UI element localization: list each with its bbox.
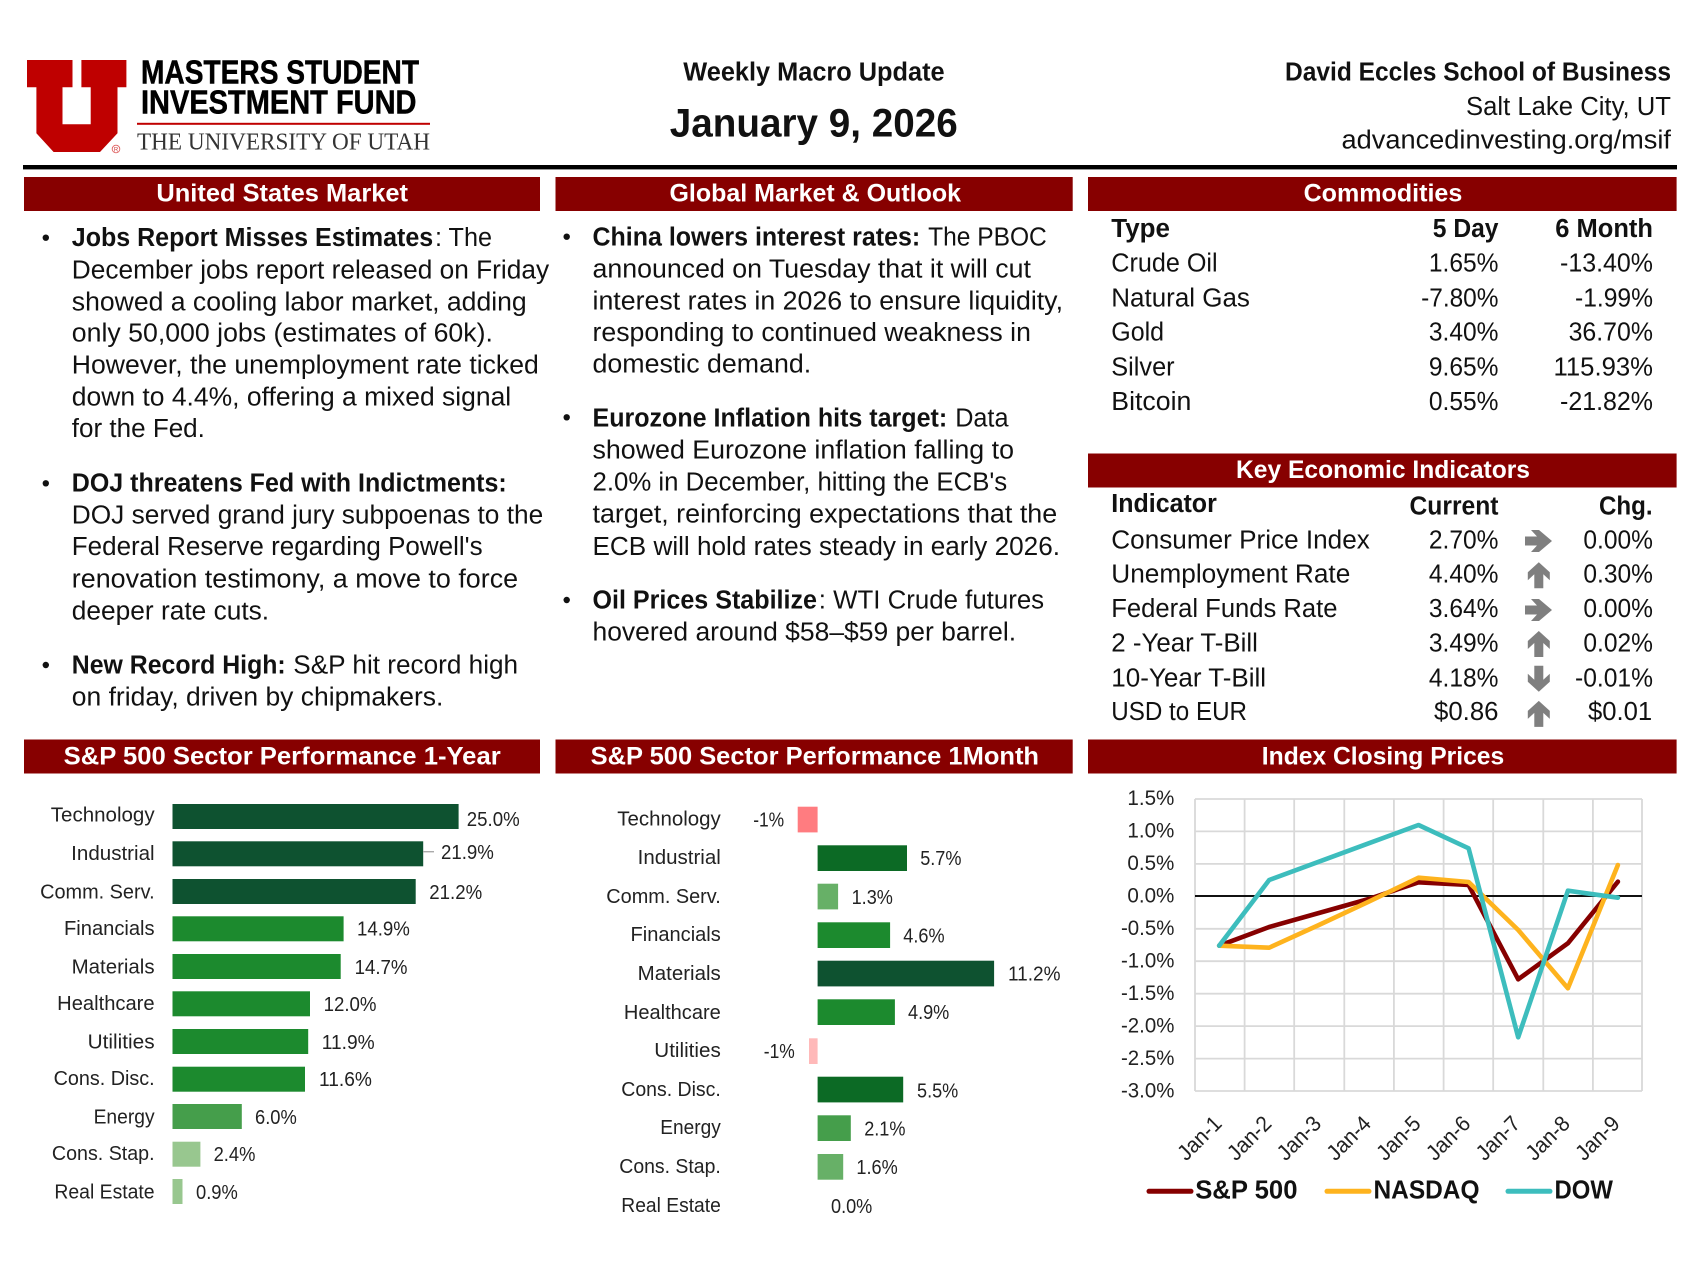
heading: Index Closing Prices: Index Closing Prices (1262, 742, 1504, 770)
values: -1% (753, 810, 784, 832)
sector labels: Materials (638, 963, 721, 985)
row: Unemployment: Unemployment Rate (1111, 561, 1350, 589)
text block: record high: on friday, driven by chipmakers. (72, 684, 443, 712)
date title: January 9, 2026 (670, 102, 958, 146)
panel: Index Closing Prices (1088, 740, 1677, 1204)
row: Crude Oil (1111, 250, 1653, 278)
row: 10-Year: -0.01% (1575, 664, 1653, 692)
table header: Type (1111, 215, 1170, 243)
text block: oil: hovered around $58–$59 per barrel. (592, 618, 1016, 646)
x axis labels: Jan-6 (1421, 1111, 1475, 1165)
values: 0.9% (196, 1182, 238, 1204)
text block: Eurozone: target, reinforcing expectations that the (592, 501, 1057, 529)
series: DOW (1219, 825, 1618, 1037)
sector labels: Healthcare (624, 1002, 721, 1024)
row: Gold: Gold (1111, 319, 1164, 347)
text block: DOJ (43, 470, 543, 625)
x axis labels: Jan-1 (1172, 1111, 1227, 1165)
heading: 1Month: S&P 500 Sector Performance 1Month (591, 742, 1039, 770)
row: Fed Funds: 3.64% (1429, 595, 1498, 623)
subtitle: Weekly Macro Update (683, 59, 945, 87)
row: Bitcoin (1111, 388, 1653, 416)
row: Bitcoin: Bitcoin (1111, 388, 1191, 416)
row: Natural Gas: Natural Gas (1111, 284, 1250, 312)
values: 1.3% (852, 887, 893, 909)
values: 4.6% (903, 925, 945, 947)
x axis labels: Jan-4 (1321, 1111, 1376, 1165)
text block: China: China lowers interest rates: (592, 224, 920, 252)
sector labels: Cons. Stap. (52, 1143, 155, 1165)
text block: jobs report: down to 4.4%, offering a mixed signal (72, 384, 511, 412)
legend: NASDAQ (1374, 1176, 1480, 1204)
row: Unemployment: 0.30% (1583, 561, 1653, 589)
text block: DOJ: DOJ served grand jury subpoenas to the (72, 501, 543, 529)
row: Unemployment (1111, 561, 1653, 589)
text block: China: announced on Tuesday that it will cut (592, 256, 1031, 284)
legend (1149, 1176, 1614, 1204)
sector labels (40, 805, 155, 1203)
text block: jobs report (43, 224, 549, 443)
values: 14.7% (355, 957, 408, 979)
sector labels: Healthcare (57, 993, 155, 1015)
text block: Eurozone: Data (955, 405, 1009, 433)
bars (798, 807, 994, 1180)
legend: S&P 500 (1195, 1176, 1298, 1204)
y axis labels: -3.0% (1121, 1080, 1174, 1103)
row: 10-Year: 10-Year T-Bill (1111, 664, 1266, 692)
panel: S&P 500 1-Year bar chart (24, 740, 540, 1204)
row: CPI: Consumer Price Index (1111, 526, 1370, 554)
text block: oil: : WTI Crude futures (819, 586, 1044, 614)
values (753, 810, 1061, 1218)
sector labels: Industrial (638, 847, 721, 869)
row: Fed Funds (1111, 595, 1653, 623)
registered mark (112, 145, 120, 153)
text block: DOJ: DOJ threatens Fed with Indictments: (72, 470, 507, 498)
sector labels: Technology (51, 805, 155, 827)
text block: China: responding to continued weakness in (592, 319, 1031, 347)
panel: Commodities (1088, 177, 1677, 416)
text block: DOJ: renovation testimony, a move to force (72, 565, 518, 593)
values: 0.0% (831, 1196, 872, 1218)
text block: record high (43, 651, 518, 712)
heading: Key Economic Indicators (1088, 454, 1677, 488)
x axis labels: Jan-2 (1222, 1111, 1276, 1165)
sector labels: Industrial (71, 843, 155, 865)
values: 2.4% (214, 1144, 256, 1166)
text block: Eurozone: ECB will hold rates steady in early 2026. (592, 533, 1060, 561)
values: 1.6% (856, 1157, 898, 1179)
row: CPI (1111, 526, 1653, 554)
heading: United States Market (24, 177, 540, 211)
row: Crude Oil: Crude Oil (1111, 250, 1218, 278)
logo text line 2: INVESTMENT FUND (141, 83, 416, 120)
text block: DOJ: deeper rate cuts. (72, 597, 269, 625)
text block: China (564, 224, 1063, 379)
sector labels: Real Estate (54, 1181, 155, 1203)
heading: Key Economic Indicators: Key Economic Indicators (1236, 456, 1530, 484)
y axis labels: -2.5% (1121, 1047, 1174, 1070)
row: Crude Oil: -13.40% (1560, 250, 1653, 278)
heading: Commodities: Commodities (1304, 180, 1462, 208)
sector labels: Cons. Disc. (54, 1068, 155, 1090)
sector labels: Materials (72, 956, 155, 978)
row: 2-Year: 2 -Year T-Bill (1111, 630, 1258, 658)
x axis labels: Jan-9 (1570, 1111, 1625, 1165)
title block (670, 59, 958, 146)
sector labels: Financials (630, 924, 721, 946)
row: Silver: 9.65% (1429, 353, 1498, 381)
x axis labels: Jan-7 (1471, 1111, 1525, 1165)
row: Silver (1111, 353, 1653, 381)
row: Natural Gas (1111, 284, 1653, 312)
row: Silver: Silver (1111, 353, 1175, 381)
text block: jobs report: : The (435, 224, 492, 252)
sector labels: Real Estate (621, 1195, 721, 1217)
logo text line 1: MASTERS STUDENT (141, 53, 419, 90)
y axis labels: -2.0% (1121, 1014, 1174, 1038)
y axis labels (1121, 787, 1174, 1103)
heading: 1-Year (24, 740, 540, 774)
row: USD to EUR: USD to EUR (1111, 698, 1247, 726)
table header (1111, 490, 1653, 520)
row: USD to EUR (1111, 698, 1652, 727)
heading: Global Market & Outlook (556, 177, 1073, 211)
row: 2-Year (1111, 630, 1653, 658)
row: 2-Year: 3.49% (1429, 630, 1498, 658)
text block: Eurozone: showed Eurozone inflation falling to (592, 436, 1014, 464)
y axis labels: 1.5% (1127, 787, 1174, 810)
y axis labels: 0.0% (1127, 884, 1174, 907)
x axis labels: Jan-8 (1520, 1111, 1575, 1165)
y axis labels: 0.5% (1127, 852, 1174, 875)
table header: Current (1410, 492, 1499, 520)
icon: block U (27, 60, 126, 152)
y axis labels: -1.5% (1121, 982, 1174, 1005)
x axis labels: Jan-5 (1371, 1111, 1426, 1165)
panel: Global Market & Outlook (556, 177, 1073, 646)
table header: Chg. (1599, 492, 1653, 520)
sector labels (606, 809, 721, 1217)
text block: jobs report: showed a cooling labor market, adding (72, 288, 527, 316)
values: 11.9% (322, 1032, 375, 1054)
row: Gold: 3.40% (1429, 319, 1498, 347)
row: Silver: 115.93% (1554, 353, 1653, 381)
y axis labels: -0.5% (1121, 917, 1174, 940)
row: CPI: 0.00% (1583, 526, 1653, 554)
text block: jobs report: for the Fed. (72, 415, 205, 443)
values: 21.2% (429, 882, 482, 904)
text block: oil: Oil Prices Stabilize (592, 586, 817, 614)
row: Natural Gas: -7.80% (1421, 284, 1498, 312)
values: 6.0% (255, 1107, 297, 1129)
sector labels: Cons. Stap. (619, 1156, 721, 1178)
values: -1% (764, 1041, 795, 1063)
text block: oil (564, 586, 1044, 646)
sector labels: Financials (64, 918, 155, 940)
text block: record high: New Record High: (72, 651, 286, 679)
sector labels: Utilities (88, 1031, 155, 1053)
school name: David Eccles School of Business (1285, 59, 1671, 87)
registered mark: R (114, 147, 119, 153)
sector labels: Energy (94, 1106, 155, 1128)
series: S&P 500 (1219, 882, 1618, 979)
y axis labels: -1.0% (1121, 950, 1174, 972)
text block: China: The PBOC (928, 224, 1047, 252)
x axis labels (1172, 1111, 1625, 1165)
heading: 1-Year: S&P 500 Sector Performance 1-Year (64, 742, 501, 770)
text block: jobs report: Jobs Report Misses Estimates (72, 224, 433, 252)
heading: Global Market & Outlook: Global Market & Outlook (670, 180, 961, 208)
values: 11.6% (319, 1069, 372, 1091)
bars (172, 804, 459, 1204)
text block: jobs report: However, the unemployment rate ticked (72, 351, 539, 379)
panel: United States Market (24, 177, 549, 712)
row: 10-Year: 4.18% (1429, 664, 1498, 692)
row: Fed Funds: 0.00% (1583, 595, 1653, 623)
row: Natural Gas: -1.99% (1575, 284, 1653, 312)
text block: record high: S&P hit record high (293, 651, 518, 679)
row: Crude Oil: 1.65% (1429, 250, 1498, 278)
x axis labels: Jan-3 (1272, 1111, 1326, 1165)
row: Bitcoin: -21.82% (1560, 388, 1653, 416)
legend: DOW (1554, 1176, 1614, 1204)
table header (1111, 215, 1653, 243)
text block: DOJ: Federal Reserve regarding Powell's (72, 533, 483, 561)
row: Gold: 36.70% (1569, 319, 1653, 347)
logo red line (137, 123, 430, 125)
text block: China: interest rates in 2026 to ensure liquidity, (592, 287, 1063, 315)
values: 11.2% (1008, 964, 1061, 986)
heading: United States Market: United States Market (156, 180, 409, 208)
table header: Indicator (1111, 490, 1217, 518)
panel: S&P 500 1-Month bar chart (556, 740, 1073, 1218)
table header: 6 Month (1555, 215, 1653, 243)
text block: jobs report: December jobs report released on Friday (72, 257, 549, 285)
text block: Eurozone: 2.0% in December, hitting the ECB's (592, 469, 1007, 497)
values: 4.9% (908, 1002, 949, 1024)
table header: 5 Day (1433, 215, 1499, 243)
sector labels: Cons. Disc. (621, 1079, 721, 1101)
text block: jobs report: only 50,000 jobs (estimates of 60k). (72, 320, 493, 348)
y axis labels: 1.0% (1127, 820, 1174, 842)
values: 25.0% (467, 809, 520, 831)
heading: Index Closing Prices (1088, 740, 1677, 774)
sector labels: Comm. Serv. (40, 881, 155, 903)
values (196, 809, 520, 1204)
sector labels: Technology (617, 809, 721, 831)
text block: China: domestic demand. (592, 351, 811, 379)
location: Salt Lake City, UT (1466, 93, 1671, 121)
text block: Eurozone (564, 405, 1060, 561)
row: USD to EUR: $0.01 (1588, 698, 1652, 726)
values: 5.7% (920, 848, 962, 870)
row: Unemployment: 4.40% (1429, 561, 1498, 589)
row: USD to EUR: $0.86 (1434, 698, 1498, 726)
heading: Commodities (1088, 177, 1677, 211)
line chart (1195, 799, 1642, 1091)
row: Gold (1111, 319, 1653, 347)
website: advancedinvesting.org/msif (1342, 126, 1672, 154)
sector labels: Comm. Serv. (606, 886, 721, 908)
row: 10-Year (1111, 664, 1653, 692)
sector labels: Energy (660, 1117, 721, 1139)
row: Bitcoin: 0.55% (1429, 388, 1498, 416)
values: 2.1% (864, 1118, 906, 1140)
values: 21.9% (441, 842, 494, 864)
row: Fed Funds: Federal Funds Rate (1111, 595, 1338, 623)
sector labels: Utilities (654, 1040, 721, 1062)
row: CPI: 2.70% (1429, 526, 1498, 554)
logo university name: THE UNIVERSITY OF UTAH (137, 129, 430, 155)
school info (1285, 59, 1672, 154)
series: NASDAQ (1219, 865, 1618, 988)
row: 2-Year: 0.02% (1583, 630, 1653, 658)
values: 5.5% (917, 1080, 958, 1102)
logo: Masters Student Investment Fund (27, 53, 430, 155)
values: 12.0% (324, 994, 377, 1016)
panel: Key Economic Indicators (1088, 454, 1677, 727)
text block: Eurozone: Eurozone Inflation hits target: (592, 405, 947, 433)
values: 14.9% (357, 919, 410, 941)
